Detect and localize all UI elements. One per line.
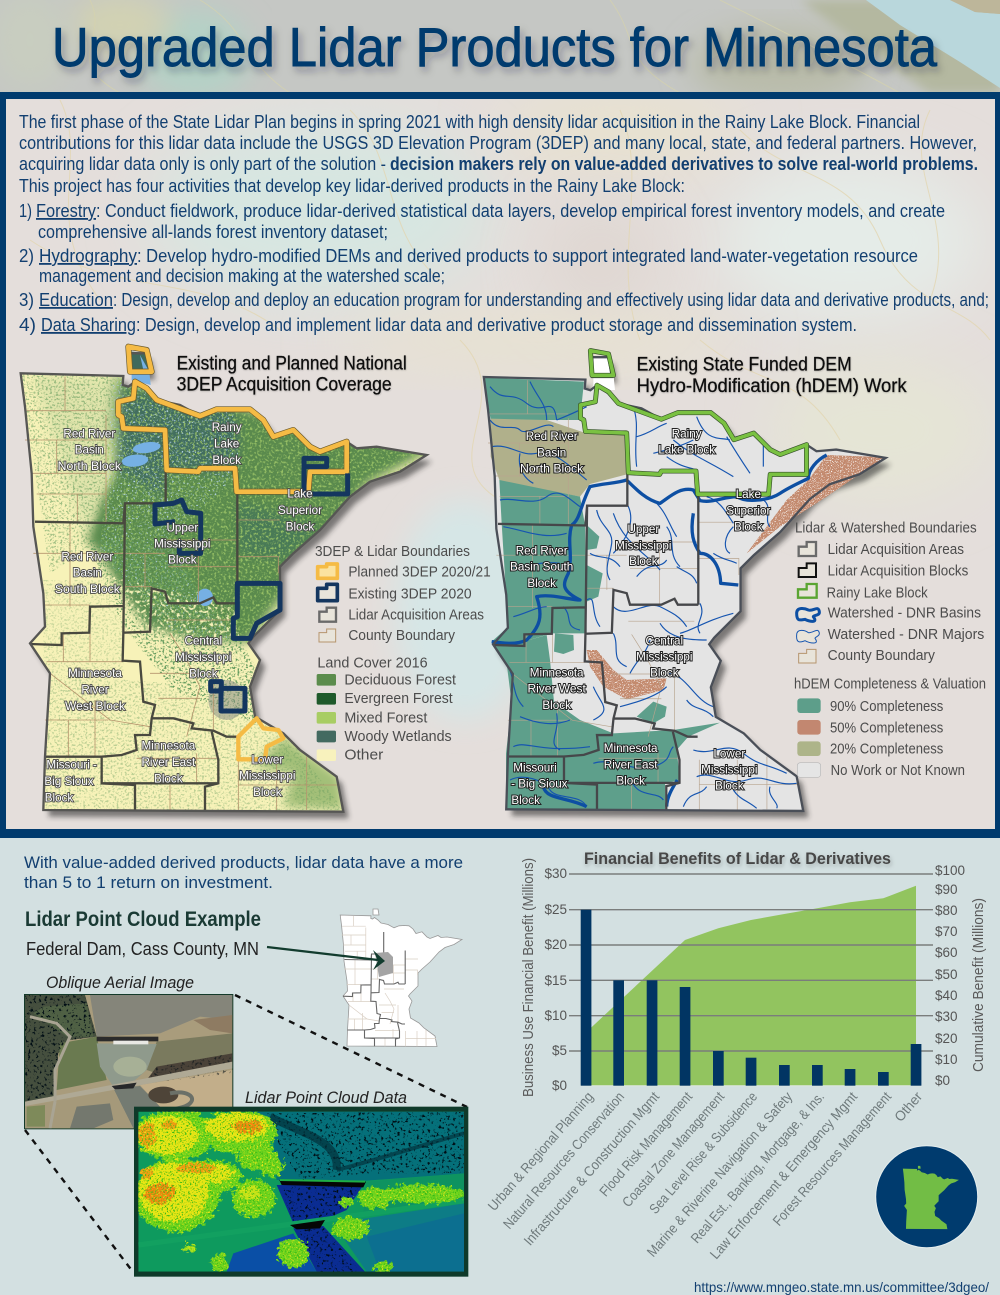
block labels: West Block [65, 700, 125, 713]
text block: activity 2 hydrography: management and decision making at the watershed scale; [39, 266, 445, 286]
block labels: Mississippi [636, 651, 693, 664]
block labels: River [81, 683, 109, 696]
land cover map [22, 374, 424, 810]
text block: activity 4 data sharing: : Design, develop and implement lidar data and derivative product storage and dissemination system. [136, 315, 857, 335]
right axis labels [935, 863, 965, 1088]
right axis labels: $60 [935, 945, 958, 960]
block labels: Lake [214, 437, 239, 450]
county boundaries [25, 377, 340, 811]
block labels: Mississippi [239, 770, 296, 783]
block labels: Block [542, 699, 571, 712]
map title: hDEM work: Existing State Funded DEM [637, 355, 852, 376]
block labels: River East [141, 756, 196, 769]
legend: 3DEP and land cover: Lidar Acquisition Areas [348, 607, 484, 623]
block labels: Superior [278, 504, 322, 517]
right axis labels: $40 [935, 988, 958, 1003]
legend: 3DEP and land cover: Woody Wetlands [344, 729, 452, 745]
rainy lake block boundary [580, 351, 807, 494]
block labels: Mississippi [175, 651, 232, 664]
block labels: Basin [75, 444, 104, 457]
map title: hDEM work [637, 355, 907, 397]
text block: activity 4 data sharing: Data Sharing [41, 315, 136, 335]
caption: oblique aerial image: Oblique Aerial Image [46, 973, 194, 992]
map shadow [26, 360, 432, 818]
block labels: Block [45, 792, 73, 805]
block labels: Mississippi [615, 539, 672, 552]
block labels: Red River [61, 550, 113, 563]
block labels: Block [629, 555, 658, 568]
right axis labels: $20 [935, 1031, 958, 1046]
lidar acquisition blocks [493, 433, 698, 811]
icon: Minnesota badge [876, 1146, 978, 1248]
block labels: - Big Sioux [511, 778, 568, 791]
block labels: Basin South [510, 561, 573, 574]
block labels: Lake [287, 488, 313, 501]
right axis labels: $0 [935, 1073, 950, 1088]
arrow: location pointer [267, 947, 385, 970]
legend: 3DEP and land cover: Land Cover 2016 [317, 655, 428, 671]
legend: boundaries and completeness: Lidar Acquisition Areas [828, 542, 964, 558]
text block: activity 2 hydrography: 2) [19, 246, 34, 266]
block labels: Rainy [672, 427, 702, 440]
category labels: Flood Risk Management [596, 1088, 695, 1199]
right axis labels: $10 [935, 1052, 958, 1067]
legend: boundaries and completeness [794, 521, 986, 779]
block labels: Block [212, 454, 241, 467]
business use bars [581, 910, 921, 1086]
existing 3DEP boundary [155, 458, 348, 711]
map title: national coverage: 3DEP Acquisition Coverage [177, 375, 392, 396]
state outline [484, 357, 886, 811]
map title: national coverage [177, 353, 407, 396]
panel: 3DEP coverage map [13, 340, 491, 820]
block labels: Mississippi [154, 538, 211, 551]
text block: activity 1 forestry: Forestry [36, 201, 96, 221]
left axis labels [544, 866, 567, 1093]
category labels: Other [891, 1088, 925, 1125]
legend: boundaries and completeness: 90% Completeness [830, 699, 943, 715]
block labels: River East [604, 758, 658, 771]
legend: boundaries and completeness: 20% Completeness [830, 742, 943, 758]
text block: activity 2 hydrography [19, 246, 918, 286]
lidar acquisition blocks [30, 430, 237, 812]
block labels: Red River [516, 544, 568, 557]
map shadow [489, 364, 891, 818]
block labels: Block [616, 775, 645, 788]
text block: introduction: This project has four activities that develop key lidar-derived products in the Rainy Lake Block: [19, 176, 685, 196]
block labels: River West [527, 683, 587, 696]
block labels: Lower [713, 748, 745, 761]
block labels: Mississippi [701, 764, 758, 777]
block labels: Block [168, 554, 197, 567]
block labels: Block [527, 577, 556, 590]
text block: activity 3 education: 3) [19, 290, 34, 310]
block labels: Red River [526, 430, 578, 443]
left axis labels: $10 [544, 1008, 567, 1023]
legend: boundaries and completeness: County Boundary [828, 648, 936, 664]
left axis labels: $30 [544, 866, 567, 881]
gridlines [569, 874, 933, 1051]
legend: boundaries and completeness: No Work or Not Known [831, 763, 965, 779]
heading: lidar point cloud example: Lidar Point Cloud Example [25, 908, 261, 931]
block labels: Big Sioux [44, 775, 94, 788]
category labels: Natural Resources Conservation [500, 1088, 627, 1232]
text block: activity 2 hydrography: : Develop hydro-modified DEMs and derived products to support integrated land-water-vegetation resource [137, 246, 918, 266]
category labels: Coastal Zone Management [619, 1088, 727, 1210]
block labels: Central [185, 635, 222, 648]
category labels: Sea Level Rise & Subsidence [646, 1088, 760, 1217]
left axis labels: $20 [544, 937, 567, 952]
dashed zoom lines [25, 995, 467, 1272]
map title: hDEM work: Hydro-Modification (hDEM) Work [637, 376, 907, 397]
legend: 3DEP and land cover: Evergreen Forest [344, 691, 453, 707]
cumulative benefit area [591, 886, 916, 1086]
text block: activity 4 data sharing: 4) [19, 315, 36, 335]
block labels: Basin [537, 447, 566, 460]
map title: national coverage: Existing and Planned National [177, 353, 407, 374]
legend: 3DEP and land cover: Planned 3DEP 2020/21 [348, 565, 491, 581]
text block: activity 2 hydrography: Hydrography [39, 246, 137, 266]
block labels: Lake Block [658, 443, 715, 456]
completeness regions [477, 344, 892, 819]
left axis labels: $25 [544, 902, 567, 917]
block labels: Block [734, 521, 763, 534]
block labels: Superior [726, 504, 770, 517]
aerial photo [24, 994, 233, 1129]
category labels: Law Enforcement & Emergency Mgmt [706, 1088, 860, 1262]
panel: main background with navy frame [0, 92, 1000, 838]
legend: 3DEP and land cover: Mixed Forest [344, 710, 427, 726]
text block: introduction: acquiring lidar data only is only part of the solution - [19, 154, 386, 174]
block labels: Upper [627, 523, 659, 536]
legend: 3DEP and land cover: Existing 3DEP 2020 [348, 587, 472, 603]
county boundaries [488, 380, 800, 810]
block labels: Rainy [212, 421, 242, 434]
block labels: Lake [736, 488, 761, 501]
block labels: North Block [58, 460, 121, 473]
caption: lidar point cloud data: Lidar Point Cloud Data [245, 1088, 407, 1107]
legend: boundaries and completeness: Watershed - DNR Basins [828, 605, 981, 621]
legend: 3DEP and land cover: Other [344, 747, 383, 763]
panel: hDEM work map [477, 344, 986, 819]
right axis labels: $90 [935, 882, 958, 897]
block labels: Minnesota [530, 666, 584, 679]
legend: boundaries and completeness: 50% Completeness [830, 720, 943, 736]
block labels: Upper [166, 521, 198, 534]
block labels: South Block [55, 583, 120, 596]
category labels: Real Est., Banking, Mortgage, & Ins. [687, 1088, 827, 1246]
link: website url: https://www.mngeo.state.mn.us/committee/3dgeo/ [694, 1279, 989, 1295]
right axis labels: $70 [935, 924, 958, 939]
left axis labels: $15 [544, 973, 567, 988]
right axis labels: $30 [935, 1009, 958, 1024]
block labels [44, 421, 322, 805]
legend: boundaries and completeness: Watershed - DNR Majors [828, 627, 984, 643]
block labels: Minnesota [68, 667, 122, 680]
block labels: Block [253, 786, 282, 799]
northwest angle land and lake [132, 352, 151, 385]
block labels: Missouri [513, 762, 557, 775]
block labels: Block [715, 780, 744, 793]
left axis labels: $5 [552, 1043, 567, 1058]
text block: return on investment [24, 853, 463, 892]
title: Upgraded Lidar Products for Minnesota [52, 16, 937, 78]
legend: 3DEP and land cover: Deciduous Forest [344, 672, 456, 688]
block labels: Missouri - [46, 758, 97, 771]
right axis labels: $80 [935, 903, 958, 918]
header background [0, 0, 1000, 92]
block labels [510, 427, 770, 807]
block labels: Minnesota [141, 740, 196, 753]
block labels: Minnesota [604, 742, 658, 755]
text block: activity 1 forestry: 1) [19, 201, 32, 221]
text block: return on investment: than 5 to 1 return on investment. [24, 873, 273, 892]
text: location name: Federal Dam, Cass County, MN [26, 939, 259, 959]
lidar point cloud image [133, 1107, 468, 1277]
legend: boundaries and completeness: Rainy Lake Block [827, 585, 928, 601]
category labels: Urban & Regional Planning [484, 1088, 596, 1214]
block labels: Red River [63, 427, 115, 440]
locator map [340, 909, 462, 1046]
right axis title: Cumulative Benefit (Millions) [970, 898, 987, 1072]
left axis labels: $0 [552, 1078, 567, 1093]
legend: 3DEP and land cover: County Boundary [348, 628, 456, 644]
block labels: Block [286, 520, 314, 533]
legend: boundaries and completeness: Lidar Acquisition Blocks [828, 563, 968, 579]
category labels: Marine & Riverine Navigation & Safety [643, 1088, 795, 1260]
legend: boundaries and completeness: Lidar & Watershed Boundaries [795, 521, 977, 537]
watershed majors [490, 382, 797, 808]
category labels: Infrastructure & Construction Mgmt [520, 1088, 662, 1248]
block labels: Block [189, 667, 218, 680]
category labels: Forest Resources Management [769, 1088, 894, 1229]
block labels: Basin [73, 567, 102, 580]
block labels: Lower [251, 754, 283, 767]
block labels: Central [646, 634, 683, 647]
block labels: Block [650, 667, 679, 680]
text block: return on investment: With value-added derived products, lidar data have a more [24, 853, 463, 872]
left axis title: Business Use Financial Benefit (Millions) [520, 858, 537, 1097]
block labels: Block [154, 773, 183, 786]
block labels: Block [511, 794, 540, 807]
text block: introduction [19, 112, 978, 196]
planned 3DEP boundary [118, 347, 347, 759]
text block: activity 3 education: Education [39, 290, 113, 310]
bar and area chart: financial benefits [484, 850, 987, 1262]
watershed basins [492, 455, 827, 807]
chart title: Financial Benefits of Lidar & Derivatives [584, 850, 891, 868]
text block: activity 1 forestry: comprehensive all-lands forest inventory dataset; [38, 222, 388, 242]
block labels: North Block [520, 463, 584, 476]
category labels [484, 1088, 925, 1262]
text block: activity 1 forestry [19, 201, 945, 242]
legend: 3DEP and land cover: 3DEP & Lidar Boundaries [315, 544, 470, 560]
state outline [21, 353, 427, 812]
right axis labels: $50 [935, 967, 958, 982]
legend: 3DEP and land cover [315, 544, 491, 763]
right axis labels: $100 [935, 863, 965, 878]
